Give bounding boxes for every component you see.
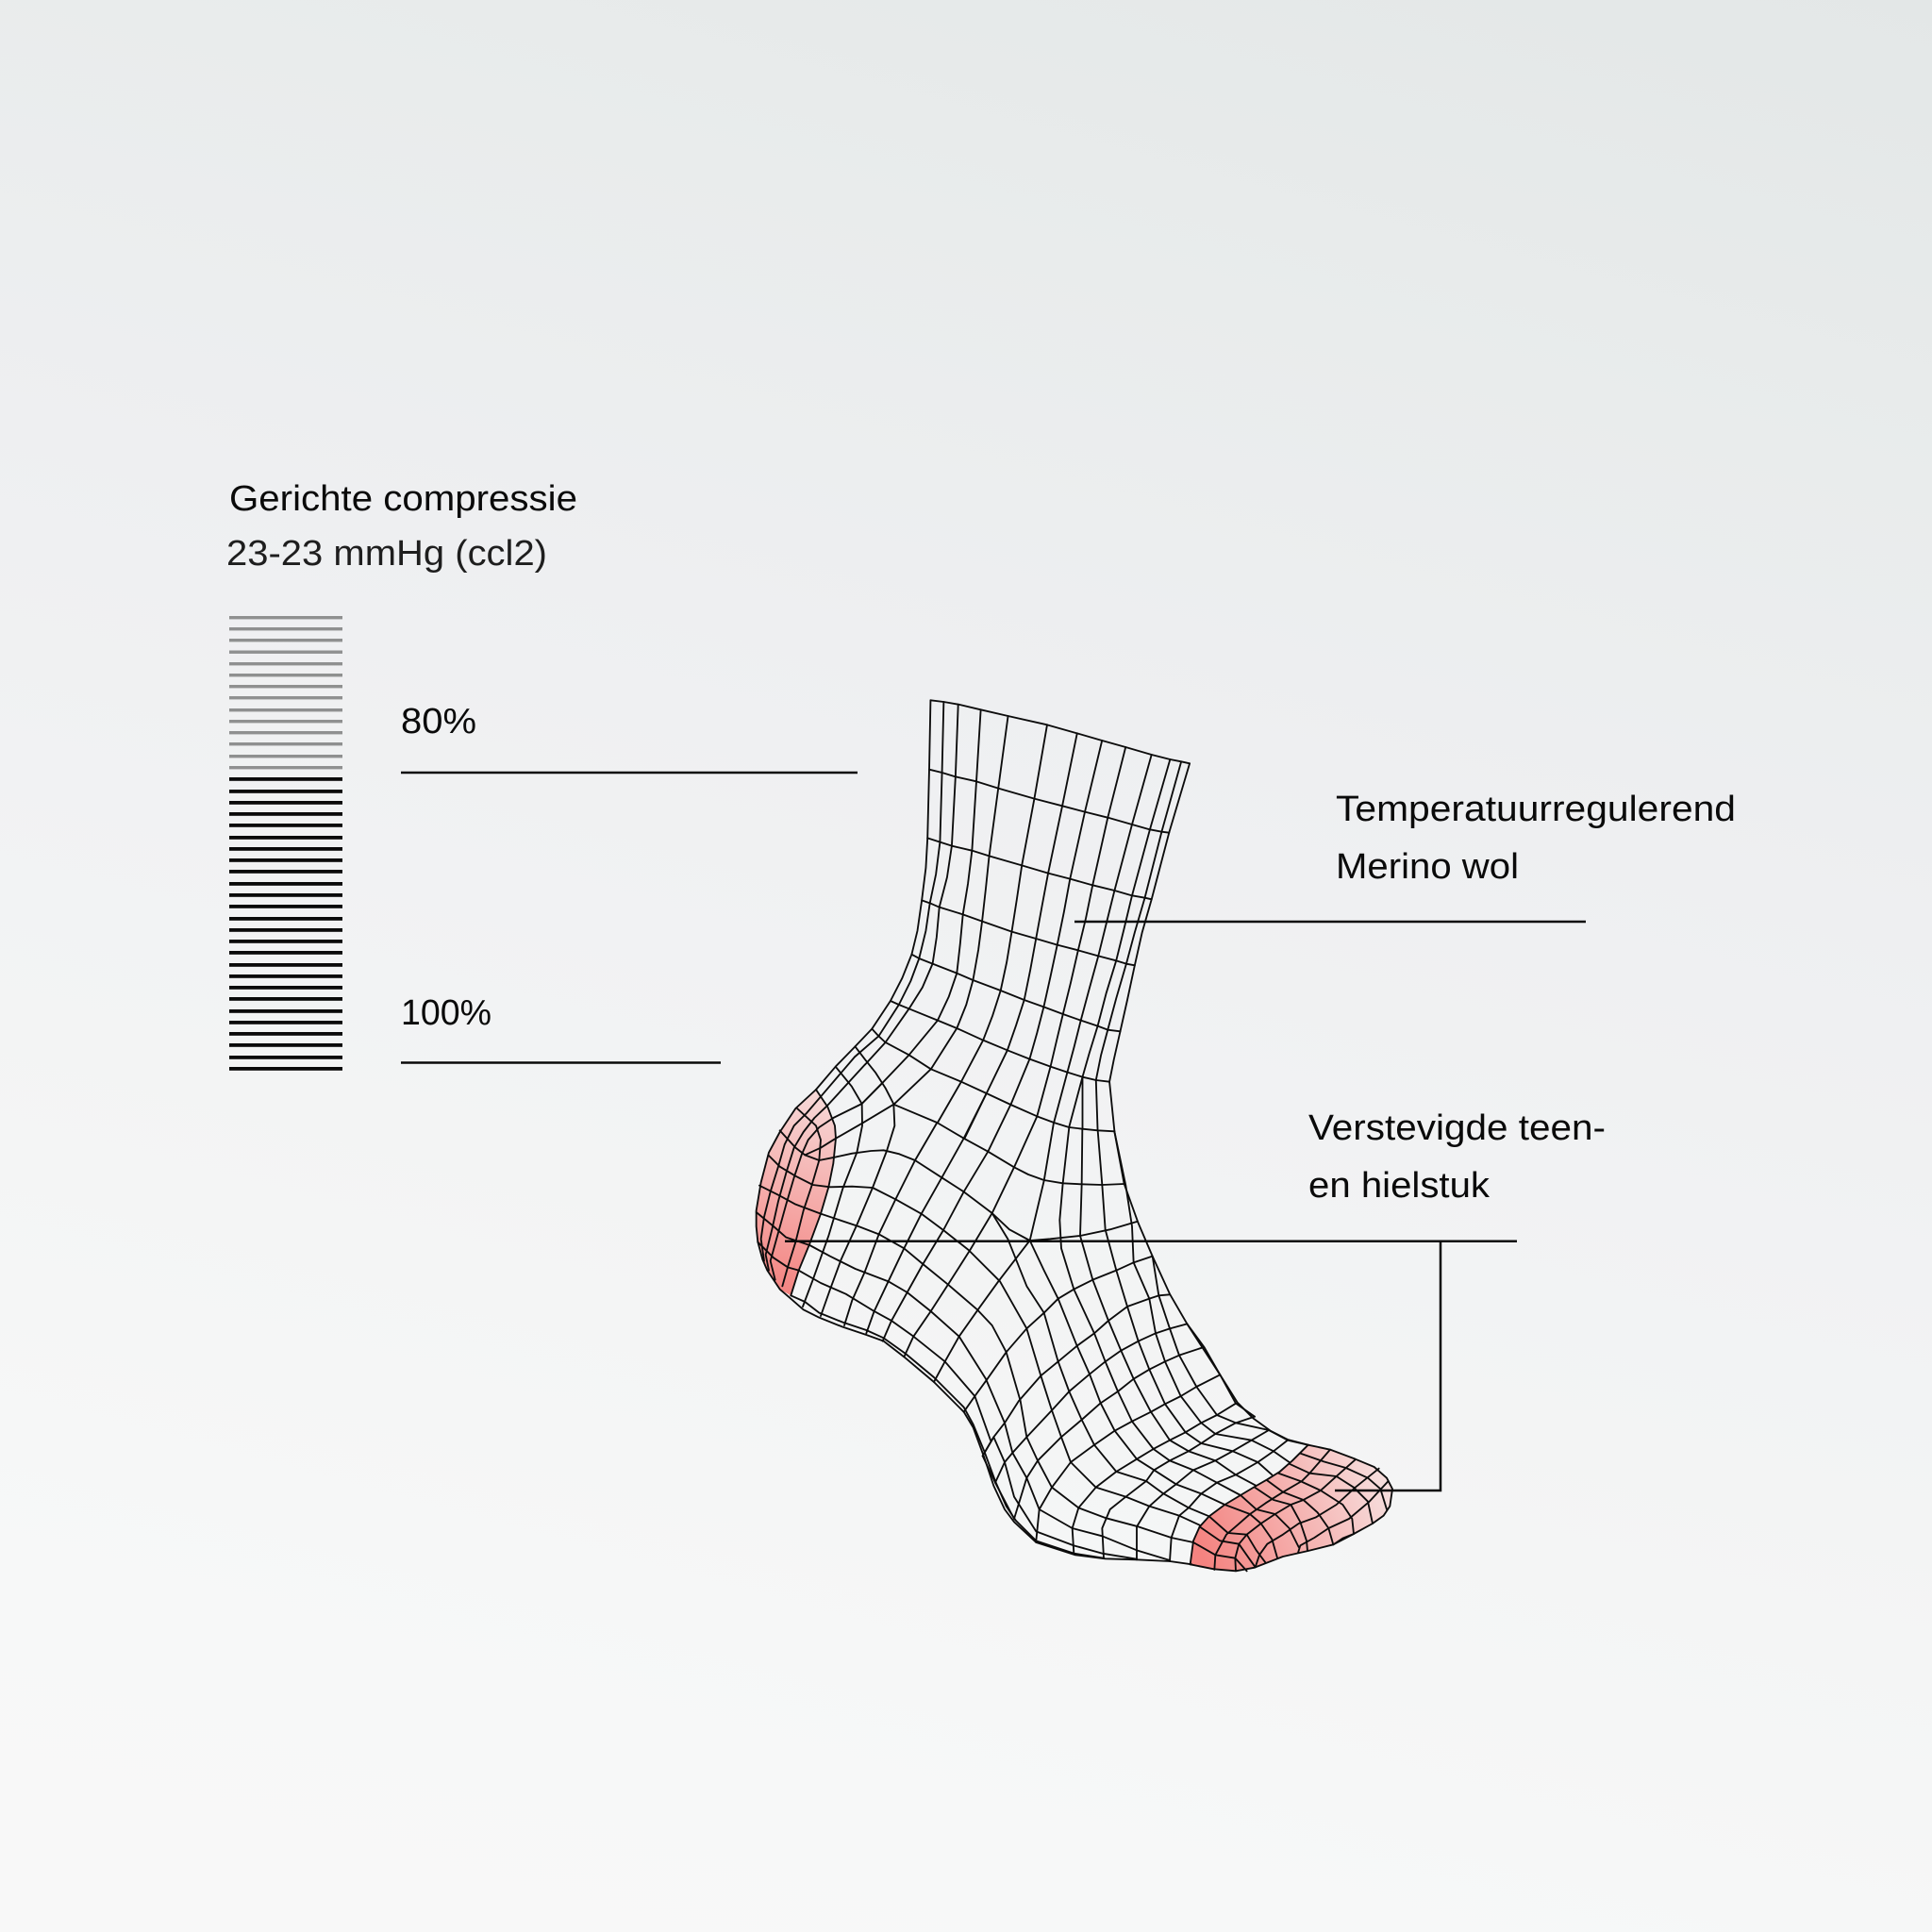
callout label: heel piece: en hielstuk [1308, 1166, 1491, 1206]
callout label: reinforced toe: Verstevigde teen- [1308, 1108, 1606, 1148]
compression scale bar [229, 616, 342, 1071]
cuff and leg mesh [816, 700, 1190, 1139]
sock wireframe illustration [757, 700, 1392, 1571]
leader line: 80% [401, 772, 858, 774]
label: 80%: 80% [401, 702, 476, 741]
heel reinforcement fill [757, 1090, 836, 1295]
leader line: 100% [401, 1061, 721, 1064]
toe reinforcement fill [1191, 1445, 1392, 1571]
callout label: temperature regulating merino wool: Temperatuurregulerend [1336, 790, 1736, 829]
label: 100%: 100% [401, 993, 491, 1033]
black lower part of scale [229, 777, 342, 1071]
leader lines: heel and toe bracket [785, 1241, 1517, 1491]
heading: compression title: Gerichte compressie [229, 479, 577, 519]
toe mesh [1191, 1445, 1392, 1571]
callout label: merino wol: Merino wol [1336, 847, 1519, 887]
forefoot mesh [983, 1257, 1308, 1564]
grey upper part of scale [229, 616, 342, 769]
leader line: merino wool [1074, 921, 1586, 923]
subheading: pressure range: 23-23 mmHg (ccl2) [226, 534, 547, 574]
heel and midfoot mesh [757, 1057, 1187, 1542]
